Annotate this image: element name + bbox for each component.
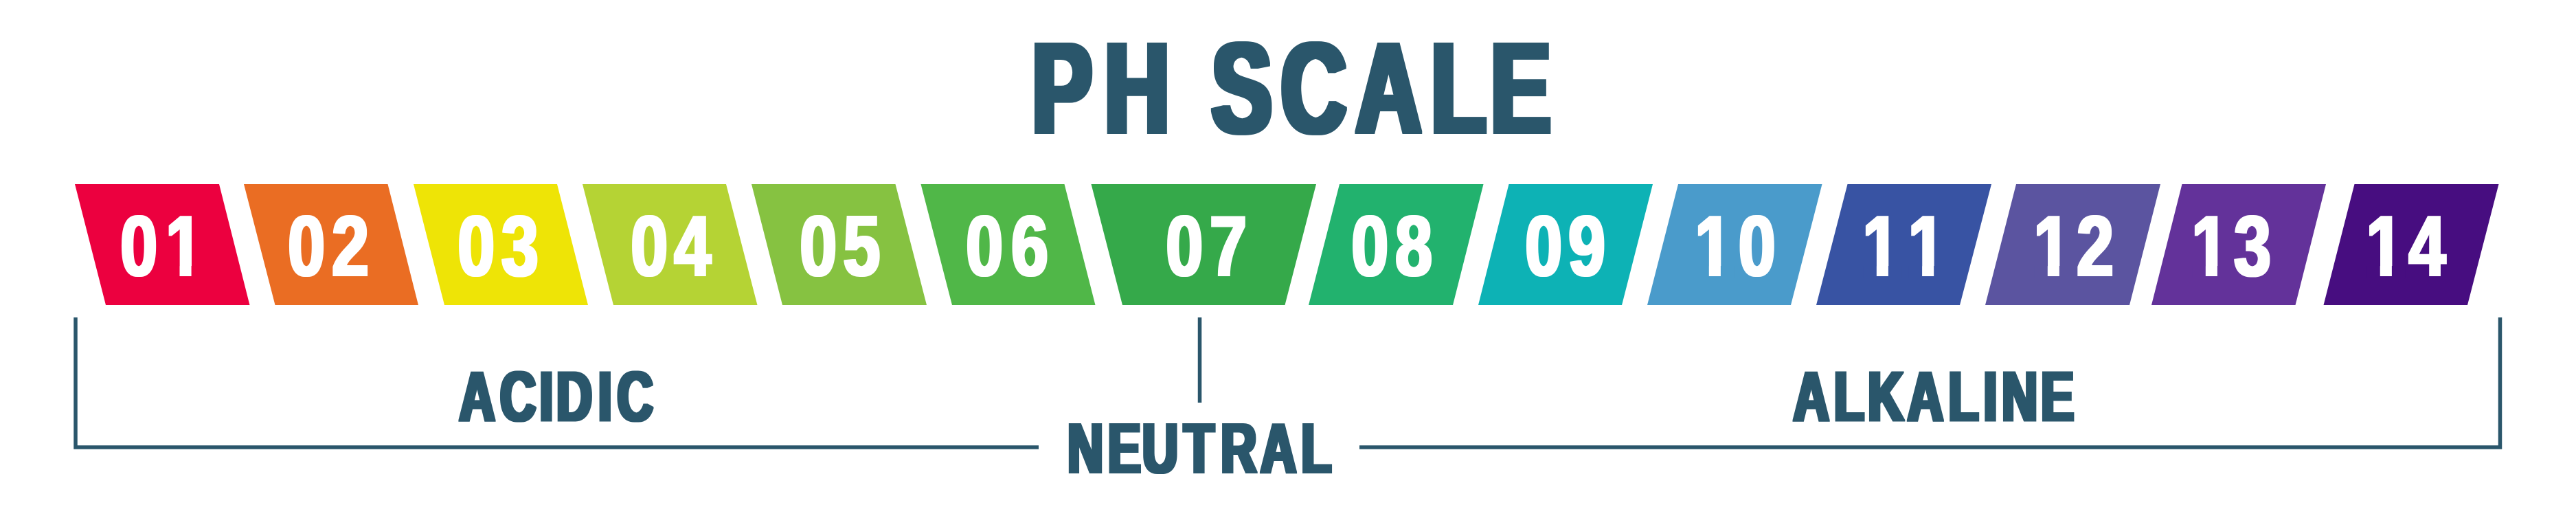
segment 01: 01 <box>120 198 203 294</box>
segment 13: 13 <box>2191 198 2271 294</box>
segment 11: 11 <box>1862 198 1945 294</box>
segment 10: 10 <box>1695 198 1776 294</box>
segment 02 <box>244 184 418 305</box>
segment 14: 14 <box>2366 198 2445 294</box>
title: PH SCALE <box>1032 16 1551 161</box>
segment 04: 04 <box>631 198 711 294</box>
segment 12: 12 <box>2033 198 2114 294</box>
neutral pointer line <box>1198 317 1201 403</box>
segment 05: 05 <box>800 198 880 294</box>
segment 03 <box>414 184 588 305</box>
segment 07 <box>1091 184 1316 305</box>
acidic bracket <box>76 317 1039 447</box>
segment 02: 02 <box>288 198 369 294</box>
segment 09: 09 <box>1525 198 1605 294</box>
acidic label: ACIDIC <box>459 357 653 436</box>
alkaline bracket <box>1359 317 2500 447</box>
segment 14 <box>2323 184 2499 305</box>
segment 08 <box>1309 184 1484 305</box>
segment 09 <box>1478 184 1653 305</box>
segment 12 <box>1985 184 2160 305</box>
segment 10 <box>1647 184 1822 305</box>
segment 06: 06 <box>966 198 1048 294</box>
segment 03: 03 <box>457 198 539 294</box>
pH scale bar <box>75 184 2499 305</box>
segment 05 <box>752 184 927 305</box>
segment 13 <box>2151 184 2326 305</box>
segment 08: 08 <box>1351 198 1432 294</box>
segment 07: 07 <box>1166 198 1247 294</box>
neutral label: NEUTRAL <box>1067 409 1331 488</box>
segment 06 <box>920 184 1095 305</box>
alkaline label: ALKALINE <box>1794 357 2074 436</box>
segment 01 <box>75 184 250 305</box>
segment 04 <box>583 184 757 305</box>
segment 11 <box>1816 184 1991 305</box>
